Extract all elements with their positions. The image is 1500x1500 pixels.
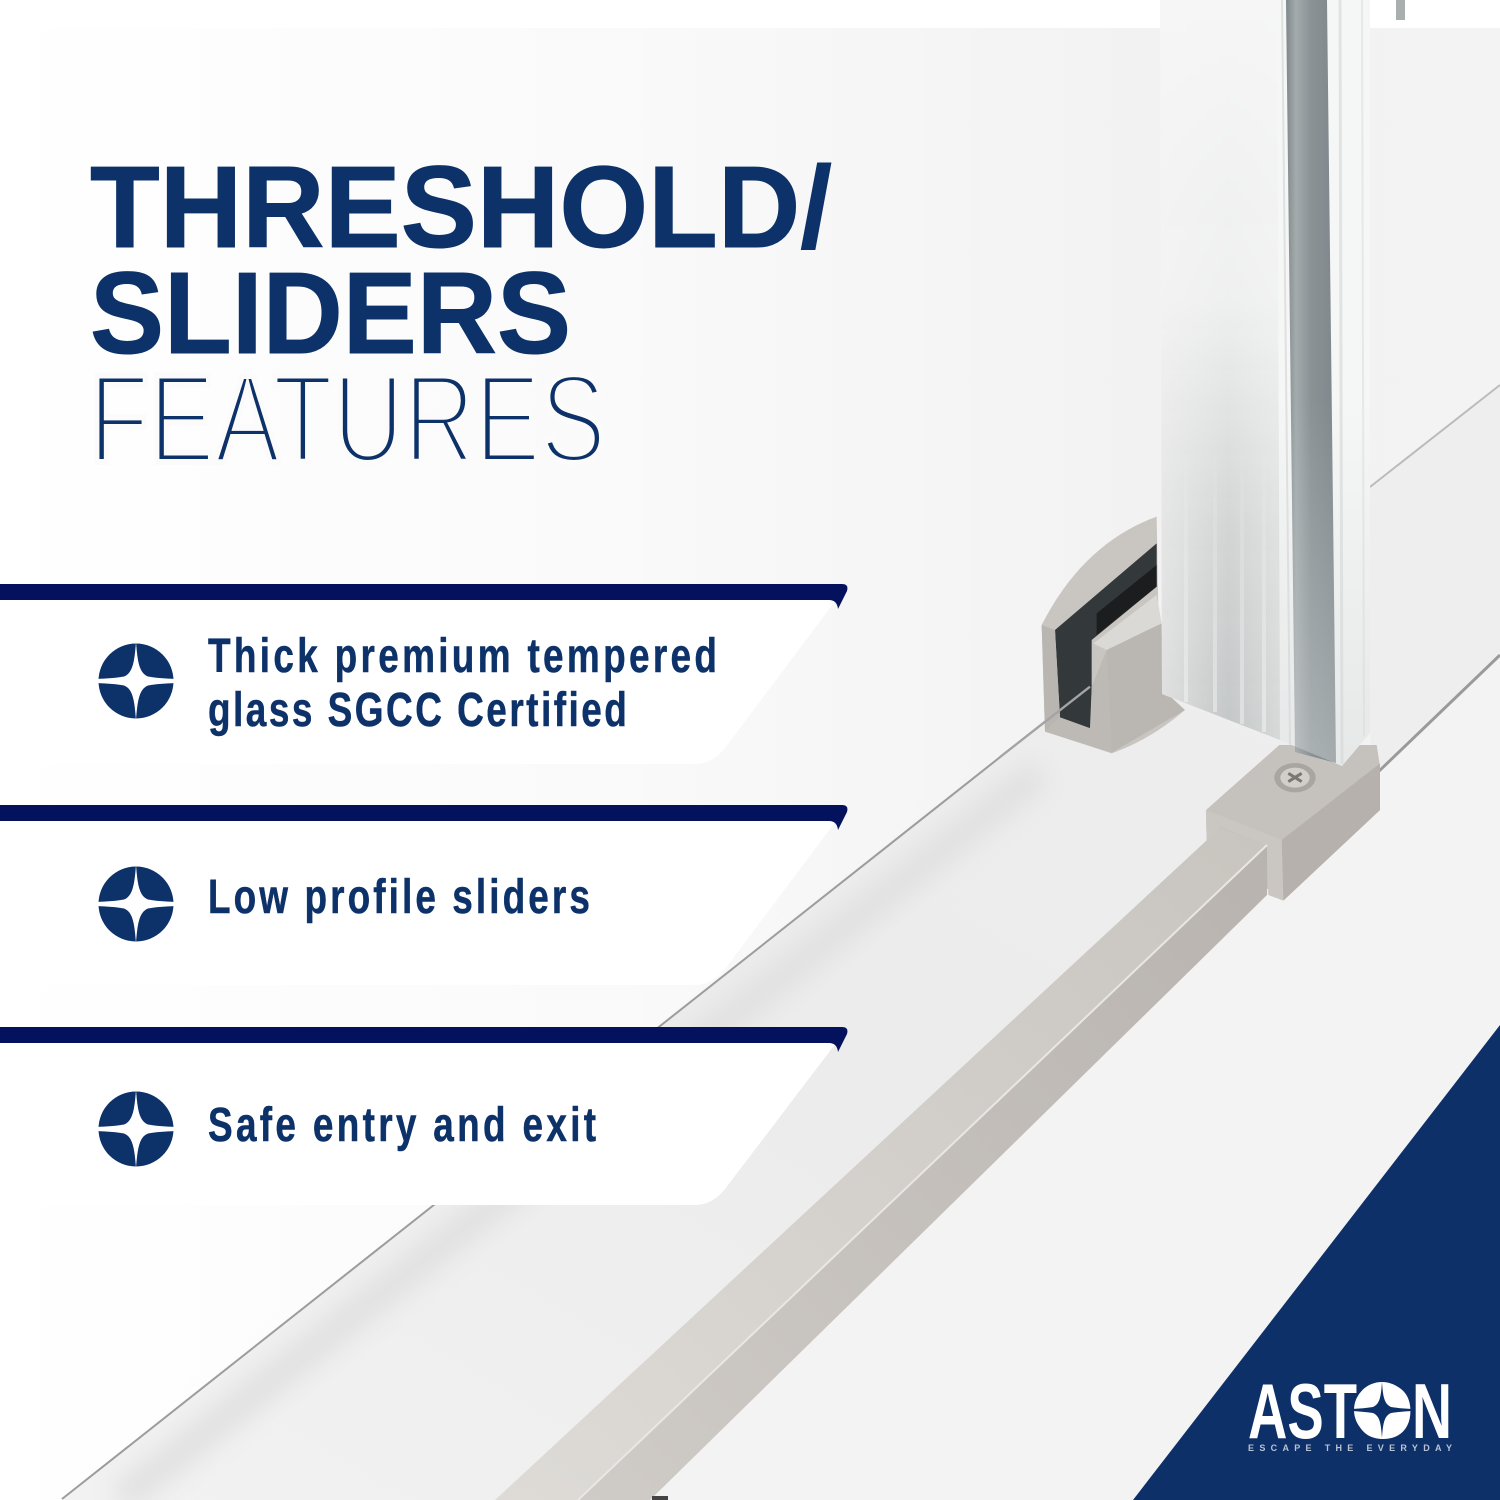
logo wordmark letters: O xyxy=(1353,1367,1414,1455)
panel: feature 3 xyxy=(0,1027,847,1205)
floor right of rail xyxy=(650,655,1500,1500)
bottom guide bracket xyxy=(1206,745,1380,901)
corner triangle xyxy=(1133,1025,1500,1500)
logo wordmark letters: N xyxy=(1412,1367,1452,1455)
threshold rail xyxy=(495,828,1267,1500)
logo: Aston xyxy=(1248,1367,1452,1455)
feature text: glass SGCC Certified xyxy=(208,683,627,737)
top white strip xyxy=(0,0,1500,28)
wire track right xyxy=(1378,655,1500,772)
feature text xyxy=(208,629,717,737)
logo star disc xyxy=(1352,1382,1412,1438)
title line: features: FEATURES xyxy=(89,350,606,489)
sliding glass panel xyxy=(1160,0,1285,742)
panel background xyxy=(0,1043,836,1205)
panel background xyxy=(0,821,836,985)
feature text: Safe entry and exit xyxy=(208,1098,596,1152)
accent bar xyxy=(0,805,847,830)
icon: star badge xyxy=(97,865,175,943)
panel: feature 2 xyxy=(0,805,847,985)
panel: feature 1 xyxy=(0,584,847,764)
feature text: Thick premium tempered xyxy=(208,629,717,683)
left glass guide clamp xyxy=(1000,517,1185,757)
icon: star badge xyxy=(97,642,175,720)
accent bar xyxy=(0,584,847,609)
wire track left xyxy=(62,686,1090,1499)
accent bar xyxy=(0,1027,847,1052)
panel background xyxy=(0,600,836,764)
floor surface xyxy=(62,640,1500,1500)
title xyxy=(89,142,832,489)
icon: star badge xyxy=(97,1090,175,1168)
logo tagline: ESCAPE THE EVERYDAY xyxy=(1248,1443,1452,1453)
shadow under track line xyxy=(120,772,1040,1500)
logo wordmark letters: AST xyxy=(1248,1367,1357,1455)
feature text: Low profile sliders xyxy=(208,870,590,924)
band between upper track and wire xyxy=(1370,387,1500,770)
upper wall track line xyxy=(1370,385,1500,487)
top right frame stub xyxy=(1396,0,1405,20)
title line: sliders: SLIDERS xyxy=(90,248,571,378)
title line: threshold: THRESHOLD/ xyxy=(90,142,832,272)
glass channel frame xyxy=(1277,0,1370,766)
